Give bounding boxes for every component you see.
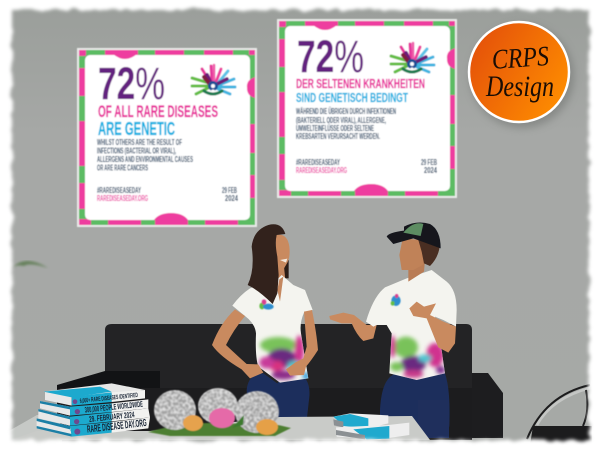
book 4: 6,000+ RARE DISEASES IDENTIFIED <box>79 392 138 405</box>
woman's face <box>276 235 290 271</box>
man's shirt paint splash <box>390 335 445 378</box>
hashtag: #RAREDISEASEDAY <box>97 186 141 195</box>
upper book <box>333 413 388 428</box>
body text: ALLERGENS AND ENVIRONMENTAL CAUSES <box>97 155 193 164</box>
date: 2024 <box>225 194 238 203</box>
man's head <box>399 238 427 270</box>
heading: 72%: 72% <box>98 58 165 109</box>
chair arm <box>583 390 587 426</box>
woman's shirt logo <box>259 299 274 310</box>
pink rose <box>209 408 235 428</box>
sofa back <box>105 324 472 400</box>
sofa <box>57 324 503 440</box>
badge disc <box>469 22 569 122</box>
badge shadow <box>470 24 574 128</box>
man's cap <box>387 222 441 248</box>
man's lower leg <box>418 400 449 438</box>
man's jeans <box>380 372 450 427</box>
poster: German <box>277 19 457 198</box>
books stack left <box>37 383 150 437</box>
book 3: 300,000 PEOPLE WORLDWIDE <box>84 400 144 415</box>
floor edge <box>0 415 62 445</box>
body text: INFECTIONS (BACTERIAL OR VIRAL), <box>97 146 176 156</box>
man's pointing arm <box>329 313 377 341</box>
man's cap print <box>403 223 423 236</box>
plant leaf <box>12 261 48 268</box>
heading: 72%: 72% <box>297 31 364 82</box>
date: 29 FEB <box>421 158 437 167</box>
poster border <box>77 48 257 227</box>
orange rose right <box>256 419 278 435</box>
body text: WHILST OTHERS ARE THE RESULT OF <box>97 138 182 147</box>
poster: English <box>77 48 257 227</box>
flower arrangement <box>148 388 291 436</box>
woman's chest skin <box>277 277 283 302</box>
hydrangea 2 <box>198 388 238 424</box>
hydrangea 3 <box>235 391 279 433</box>
woman's hair <box>248 224 285 304</box>
woman's left arm <box>212 309 263 378</box>
body text: WÄHREND DIE ÜBRIGEN DURCH INFEKTIONEN <box>296 107 396 116</box>
chair back slats <box>537 388 590 425</box>
people <box>212 222 457 427</box>
badge: CRPS Design <box>469 22 574 128</box>
woman's back hair <box>280 260 289 278</box>
woman's shirt <box>232 275 313 383</box>
body text: (BAKTERIELL ODER VIRAL), ALLERGENE, <box>296 116 386 125</box>
subheading line 2: ARE GENETIC <box>98 119 175 139</box>
body text <box>296 107 396 141</box>
orange rose left <box>183 415 203 431</box>
sofa left arm <box>57 371 160 420</box>
subheading line 2: SIND GENETISCH BEDINGT <box>296 90 408 105</box>
body text: UMWELTEINFLÜSSE ODER SELTENE <box>296 124 374 133</box>
badge text line 2: Design <box>485 70 554 103</box>
sofa seat <box>60 388 472 440</box>
woman's smile <box>280 259 287 263</box>
woman <box>212 224 318 427</box>
man's raised arm <box>409 302 456 353</box>
hydrangea 1 <box>154 390 196 430</box>
website: RAREDISEASEDAY.ORG <box>296 166 347 175</box>
woman's right arm <box>286 310 318 376</box>
poster border <box>277 19 457 198</box>
icon: hands logo <box>391 43 434 72</box>
chair seat <box>530 426 592 445</box>
chair <box>527 385 592 445</box>
green leaf <box>232 415 244 428</box>
man's neck <box>408 260 425 282</box>
chair back frame <box>527 385 590 439</box>
book 2: 29. FEBRUARY 2024 <box>88 409 135 424</box>
website: RAREDISEASEDAY.ORG <box>97 194 148 203</box>
leaves <box>148 423 291 436</box>
woman's jeans <box>247 373 309 427</box>
date: 2024 <box>424 166 437 175</box>
woman's neck and chest <box>275 267 285 305</box>
subheading line 1: DER SELTENEN KRANKHEITEN <box>296 76 425 91</box>
table <box>10 416 430 440</box>
book 1: RARE DISEASE DAY.ORG <box>86 418 147 436</box>
woman's shirt paint splash <box>259 335 309 380</box>
body text: KREBSARTEN VERURSACHT WERDEN. <box>296 132 380 141</box>
date: 29 FEB <box>222 186 237 195</box>
body text: OR ARE RARE CANCERS <box>97 164 148 172</box>
subheading line 1: OF ALL RARE DISEASES <box>98 102 218 121</box>
sofa right arm <box>472 373 503 438</box>
man's shirt logo <box>391 294 401 306</box>
man <box>329 222 457 427</box>
lower book <box>336 423 409 439</box>
icon: hands logo <box>192 65 235 94</box>
man's hair <box>418 240 440 266</box>
right table books <box>333 413 409 439</box>
man's shirt <box>366 270 457 380</box>
date <box>222 186 238 203</box>
badge text line 1: CRPS <box>491 41 550 76</box>
hashtag: #RAREDISEASEDAY <box>296 158 340 167</box>
body text <box>97 138 193 172</box>
date <box>421 158 437 175</box>
